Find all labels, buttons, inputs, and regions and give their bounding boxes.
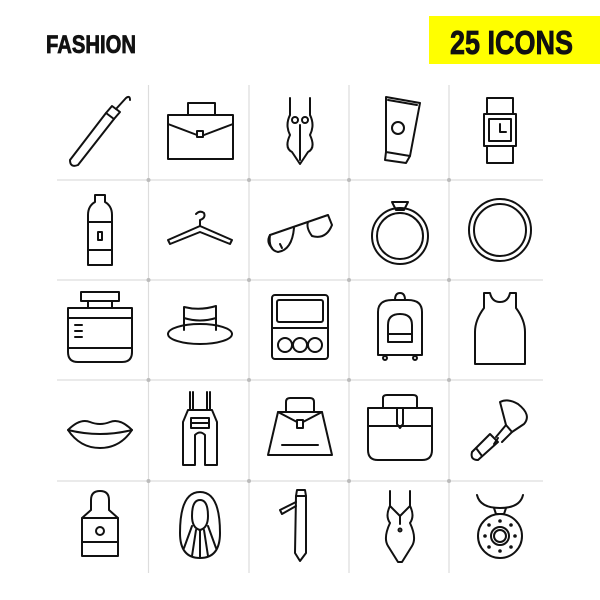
- icon: wristwatch: [484, 98, 516, 163]
- title: FASHION: [46, 31, 136, 59]
- badge: 25 icons: 25 ICONS: [450, 24, 573, 61]
- icon: handbag: [268, 398, 332, 455]
- icon: cream tube: [385, 97, 420, 163]
- icon: lips: [68, 421, 132, 448]
- icon: swimsuit 2: [386, 491, 414, 562]
- icon: briefcase: [168, 103, 233, 159]
- icon: overalls: [183, 392, 217, 465]
- icon: pendant necklace: [477, 495, 523, 558]
- icon: bottle: [88, 195, 112, 265]
- icon: sunglasses: [268, 215, 332, 252]
- icon: makeup brush: [472, 400, 527, 460]
- badge: 25 icons: [429, 16, 600, 64]
- icon: cosmetic bag: [368, 395, 432, 460]
- icon: cream jar: [68, 292, 132, 362]
- icon: umbrella: [70, 97, 130, 166]
- icon: nail: [180, 492, 220, 558]
- icon: ring: [372, 202, 428, 264]
- icon: eyeshadow palette: [272, 295, 328, 359]
- icon: hanger: [168, 212, 232, 244]
- icon: backpack: [378, 293, 422, 360]
- icon: tank top: [475, 293, 525, 364]
- icon: hat: [168, 306, 232, 344]
- icon: lotion bottle: [82, 491, 118, 556]
- icon: tie: [280, 490, 306, 561]
- icon: swimsuit: [287, 98, 313, 164]
- icon: bracelet: [469, 199, 531, 261]
